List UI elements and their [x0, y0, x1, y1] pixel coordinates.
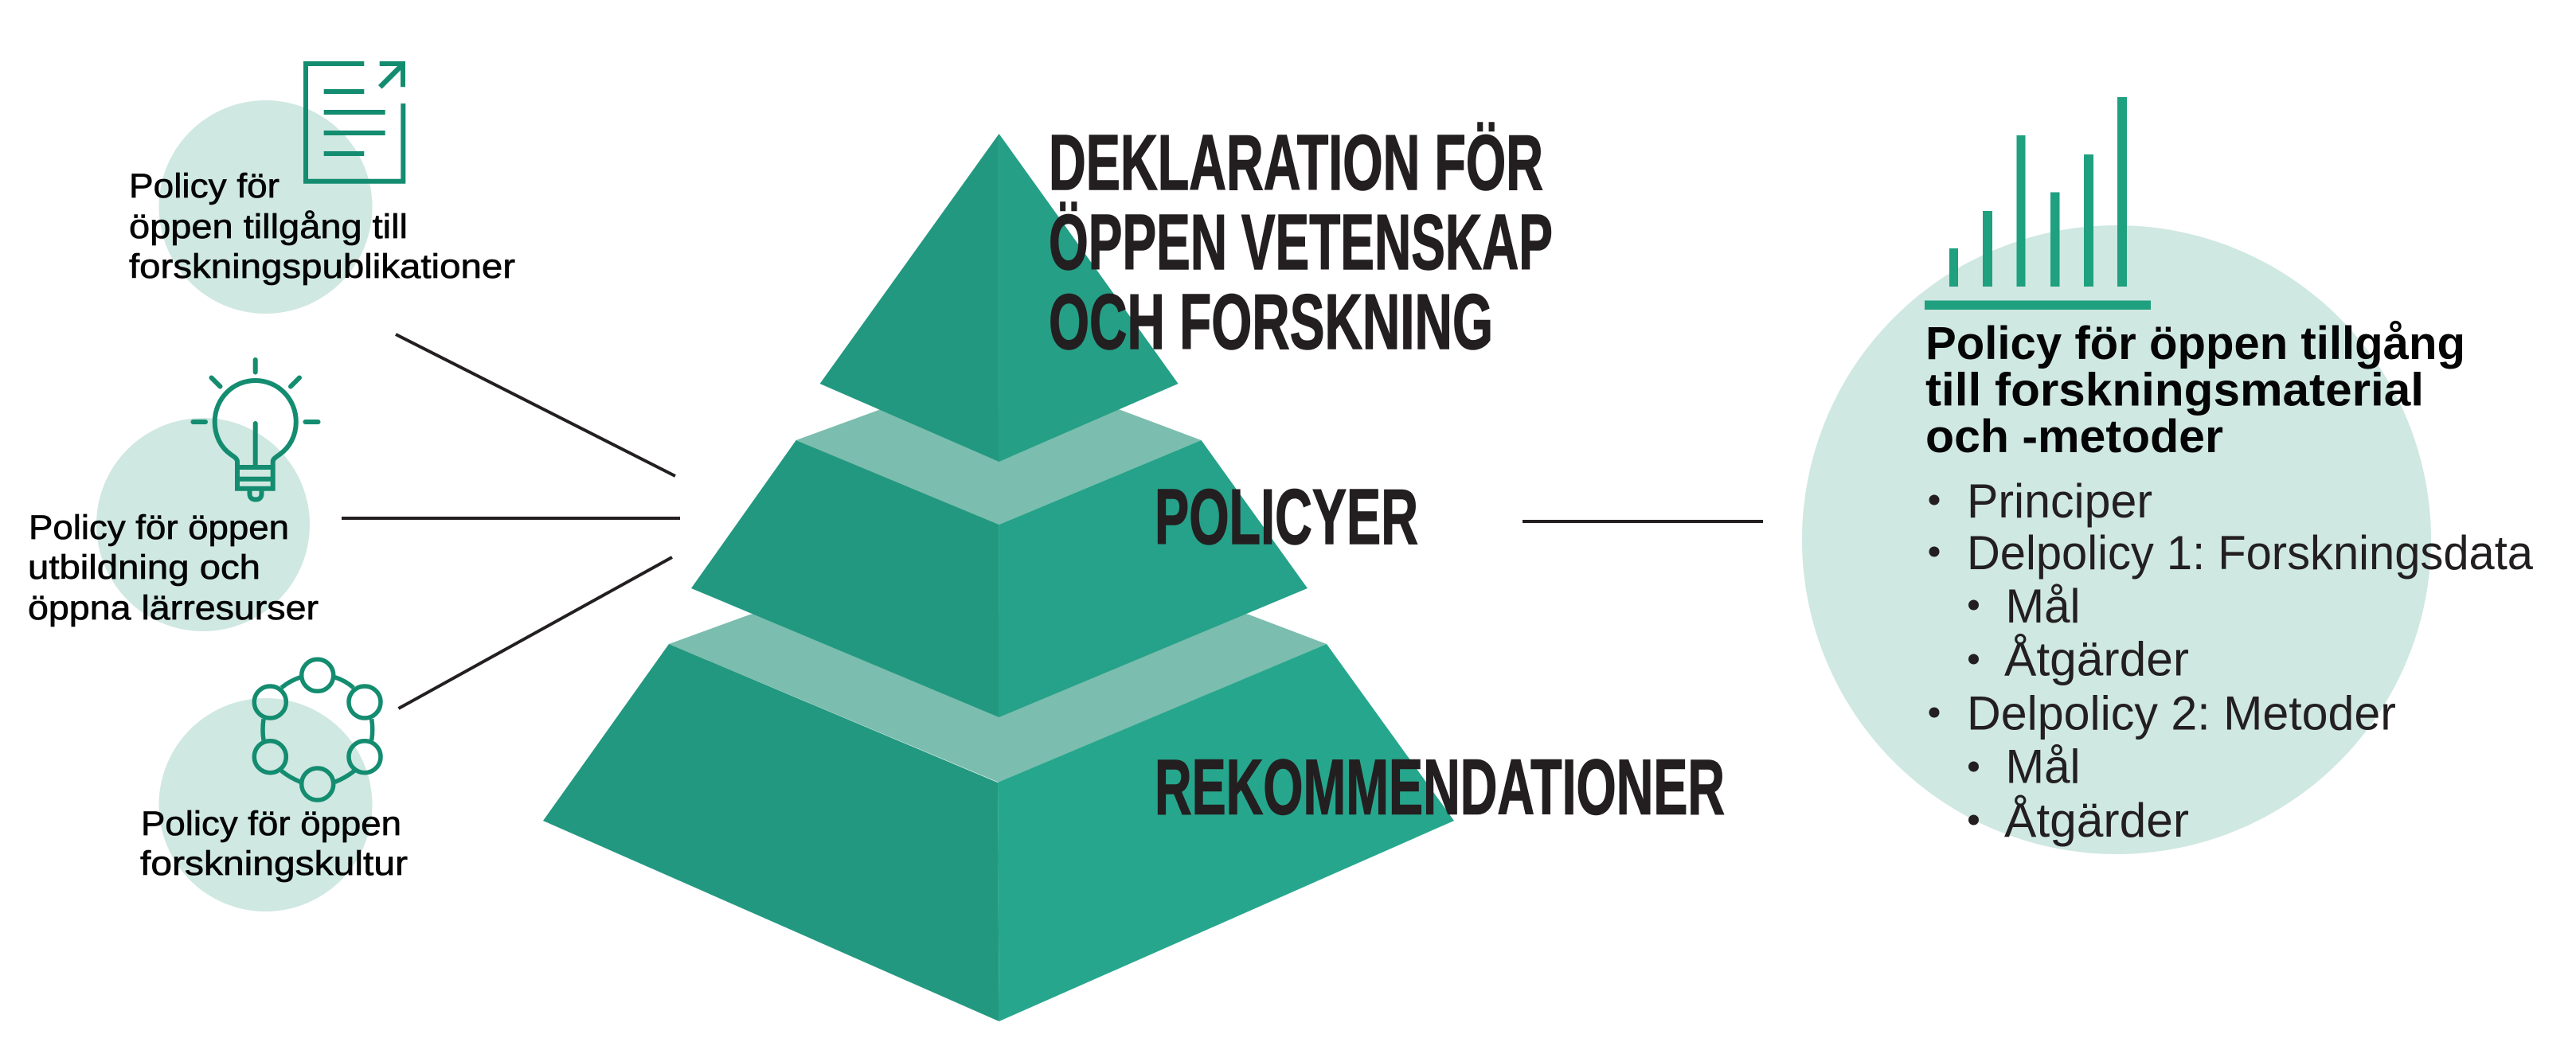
list: contents of policy: Delpolicy 1: Forskningsdata: [1967, 526, 2534, 580]
list: contents of policy: Åtgärder: [2004, 632, 2189, 686]
panel: research material policy: [1802, 97, 2534, 854]
pyramid tier: middle: [691, 440, 1308, 717]
heading: policies: POLICYER: [1155, 473, 1418, 560]
list: contents of policy: Mål: [2005, 740, 2080, 793]
icon: ring of connected nodes: [254, 659, 381, 800]
band: upper light band: [796, 409, 1202, 525]
heading: research material policy: och -metoder: [1925, 411, 2223, 463]
pyramid tier: bottom: [543, 644, 1454, 1021]
band: lower light band: [669, 615, 1327, 783]
heading: declaration: [1049, 119, 1553, 365]
panel: research culture policy: [140, 659, 408, 911]
label: education policy: Policy för öppen: [29, 509, 289, 547]
icon: document with arrow: [306, 64, 403, 182]
background circle: culture: [159, 698, 373, 911]
list bullets: [1929, 495, 1979, 825]
label: publications policy: forskningspublikationer: [129, 248, 515, 286]
background circle: research material: [1802, 225, 2431, 854]
label: education policy: [28, 509, 319, 627]
list: contents of policy: Mål: [2005, 580, 2080, 633]
list: contents of policy: Principer: [1967, 474, 2152, 528]
heading: declaration: OCH FORSKNING: [1049, 278, 1493, 365]
list: contents of policy: Delpolicy 2: Metoder: [1967, 686, 2396, 740]
icon: bar chart: [1925, 97, 2151, 310]
heading: declaration: ÖPPEN VETENSKAP: [1049, 198, 1553, 286]
icon: light bulb: [193, 360, 319, 500]
label: culture policy: [140, 805, 408, 883]
panel: education policy: [28, 360, 319, 631]
label: publications policy: öppen tillgång till: [129, 208, 408, 246]
pyramid tier: top: [820, 134, 1179, 462]
pyramid: [543, 134, 1454, 1021]
label: education policy: utbildning och: [28, 548, 260, 587]
panel: publications policy: [129, 64, 515, 314]
label: culture policy: Policy för öppen: [141, 805, 401, 843]
connector line: policies to research material panel: [1523, 520, 1763, 523]
label: publications policy: Policy för: [129, 167, 279, 205]
heading: research material policy: [1925, 318, 2465, 463]
heading: declaration: DEKLARATION FÖR: [1049, 119, 1543, 206]
label: education policy: öppna lärresurser: [28, 589, 319, 627]
background circle: education: [96, 418, 310, 631]
label: publications policy: [129, 167, 515, 286]
connector lines: policies to pyramid: [342, 334, 680, 708]
heading: research material policy: Policy för öppen tillgång: [1925, 318, 2465, 369]
heading: research material policy: till forskningsmaterial: [1925, 365, 2424, 416]
list: contents of policy: [1967, 474, 2534, 847]
background circle: publications: [159, 100, 373, 314]
heading: recommendations: REKOMMENDATIONER: [1155, 744, 1725, 831]
list: contents of policy: Åtgärder: [2004, 794, 2189, 847]
label: culture policy: forskningskultur: [140, 845, 408, 883]
